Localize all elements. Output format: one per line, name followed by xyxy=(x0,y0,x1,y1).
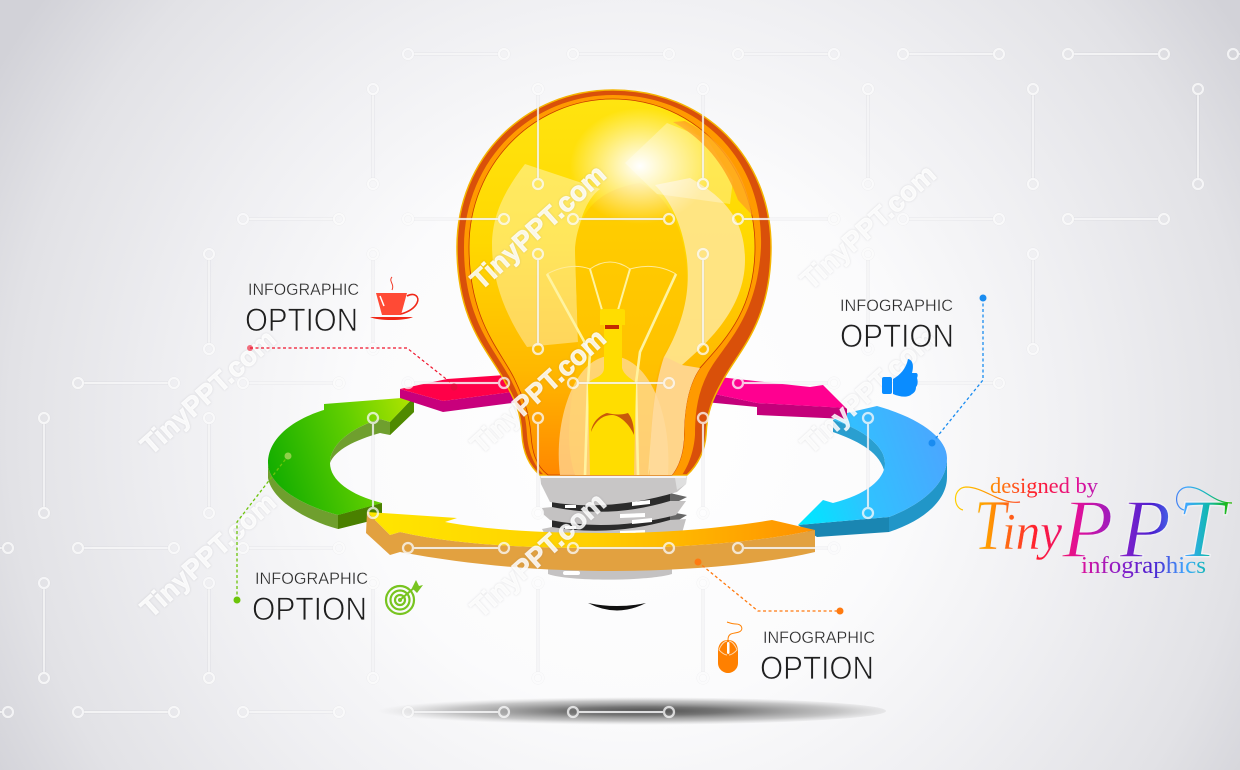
bulb screw base xyxy=(540,475,687,610)
top highlight xyxy=(625,123,733,204)
icon: thumbs up xyxy=(882,359,918,397)
watermarks: TinyPPT.com xyxy=(794,158,942,295)
glass body xyxy=(469,99,755,475)
watermarks: TinyPPT.com xyxy=(464,322,612,459)
lower glow dome xyxy=(559,356,668,475)
icon: computer mouse xyxy=(718,622,742,673)
watermarks: TinyPPT.com xyxy=(464,486,612,623)
text block: top left option: OPTION xyxy=(245,302,358,338)
text block: top right option xyxy=(840,296,954,354)
text block: bottom right option xyxy=(760,628,875,686)
arrow: blue ring segment xyxy=(798,406,947,537)
text block: top left option xyxy=(245,280,359,338)
callout connector: blue xyxy=(928,294,986,446)
watermarks: TinyPPT.com xyxy=(134,486,282,623)
arrow: green ring segment xyxy=(268,397,414,529)
watermarks: TinyPPT.com xyxy=(134,323,282,460)
arrow: magenta ring segment xyxy=(705,376,847,419)
glass outer rim xyxy=(457,90,771,475)
logo word: iny: iny xyxy=(1002,504,1063,561)
light bulb xyxy=(457,90,771,610)
right reflection xyxy=(648,178,745,475)
text block: top left option: INFOGRAPHIC xyxy=(248,280,359,299)
icon: target xyxy=(386,580,423,614)
floor shadow xyxy=(350,697,886,725)
text block: top right option: INFOGRAPHIC xyxy=(840,296,953,315)
text block: bottom left option xyxy=(252,569,368,627)
text block: bottom left option: OPTION xyxy=(252,591,367,627)
callout connector: red xyxy=(247,345,458,390)
glass inner rim xyxy=(464,95,761,475)
logo line: designed by: designed by xyxy=(990,473,1098,498)
text block: bottom right option: INFOGRAPHIC xyxy=(763,628,875,647)
icon: coffee cup xyxy=(370,277,418,320)
logo swashes xyxy=(955,487,1232,510)
right lower reflection xyxy=(650,357,700,475)
callout connector: orange xyxy=(694,558,844,614)
central glass xyxy=(569,183,687,475)
logo letter: T: T xyxy=(974,485,1010,565)
text block: top right option: OPTION xyxy=(840,318,954,354)
logo line: infographics: infographics xyxy=(1081,553,1206,579)
filament xyxy=(547,262,676,475)
text block: bottom left option: INFOGRAPHIC xyxy=(255,569,368,588)
text block: bottom right option: OPTION xyxy=(760,650,874,686)
arrow: yellow and orange ring segment xyxy=(366,512,815,571)
logo: designed by TinyPPT infographics xyxy=(955,473,1232,579)
watermarks: TinyPPT.com xyxy=(464,158,612,295)
watermarks xyxy=(134,158,942,623)
left reflection panel xyxy=(492,164,600,347)
watermarks: TinyPPT.com xyxy=(794,322,942,459)
arrow: red ring segment xyxy=(400,374,520,412)
callout connector: green xyxy=(234,452,292,604)
logo word: PPT: PPT xyxy=(1061,483,1229,576)
